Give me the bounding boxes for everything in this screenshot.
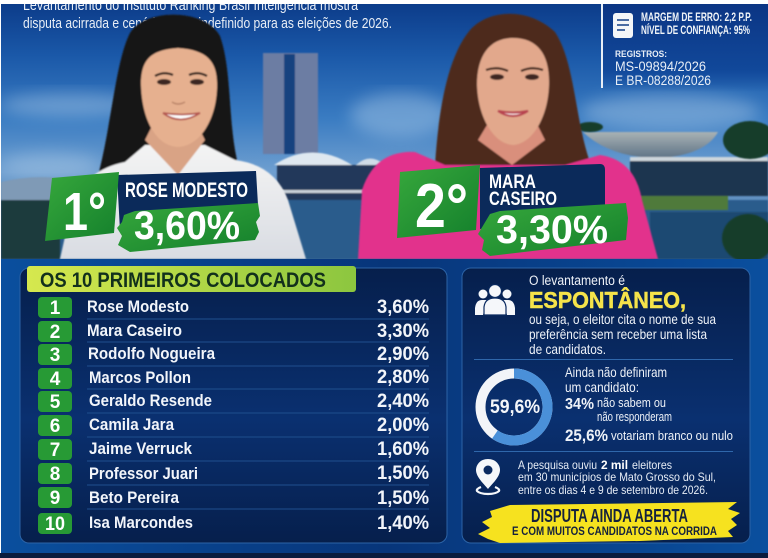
rank number: 2° xyxy=(415,172,468,241)
info box background xyxy=(603,8,768,88)
intro text: disputa acirrada e cenário ainda indefinido para as eleições de 2026. xyxy=(23,16,392,32)
row 1: Rose Modesto xyxy=(87,297,189,316)
row 9: Beto Pereira xyxy=(89,488,179,507)
candidate photo: Mara Caseiro xyxy=(358,14,658,259)
icon: people xyxy=(475,284,515,315)
spontaneous survey text: preferência sem receber uma lista xyxy=(529,326,707,342)
row 4: 4 xyxy=(50,369,61,390)
ranking panel background xyxy=(20,268,447,543)
spontaneous survey text: ou seja, o eleitor cita o nome de sua xyxy=(529,311,716,327)
rank number: 1° xyxy=(63,182,106,242)
undecided voters text xyxy=(565,364,733,445)
row 6: 6 xyxy=(50,416,60,437)
survey sample text xyxy=(518,458,716,497)
undecided voters text: não responderam xyxy=(597,409,672,424)
row 10 xyxy=(38,513,429,535)
row 8: 8 xyxy=(50,464,60,485)
row 7: Jaime Verruck xyxy=(89,439,192,458)
candidate name: ROSE MODESTO xyxy=(125,179,248,202)
details panel background xyxy=(462,268,750,543)
row 10: 1,40% xyxy=(377,513,429,534)
name plate xyxy=(480,164,605,229)
undecided voters text: votariam branco ou nulo xyxy=(611,428,733,443)
row 9: 9 xyxy=(50,488,60,509)
icon: document xyxy=(613,13,633,38)
row 2: 2 xyxy=(50,322,60,343)
intro text xyxy=(24,4,391,31)
row 3: 2,90% xyxy=(377,344,429,365)
left hills xyxy=(1,177,60,259)
row 8 xyxy=(38,463,429,485)
row 4: 2,80% xyxy=(377,367,429,388)
row 5: Geraldo Resende xyxy=(89,391,212,410)
candidate name: CASEIRO xyxy=(489,189,557,210)
row 10: Isa Marcondes xyxy=(89,513,193,532)
lower blue background xyxy=(1,259,768,553)
domes and congress building xyxy=(1,152,768,259)
row 4: Marcos Pollon xyxy=(89,368,191,387)
saucer building xyxy=(583,132,768,259)
row 7: 7 xyxy=(50,440,60,461)
row 3: Rodolfo Nogueira xyxy=(88,344,215,363)
callout: open race xyxy=(478,502,740,543)
registrations text: E BR-08288/2026 xyxy=(615,73,711,88)
row 3: 3 xyxy=(50,345,60,366)
row 8: Professor Juari xyxy=(89,464,198,483)
spontaneous survey text xyxy=(529,273,716,357)
donut chart: 59,6% xyxy=(480,373,548,440)
undecided voters text: um candidato: xyxy=(565,379,639,395)
row 5: 5 xyxy=(50,392,61,413)
row 6: Camila Jara xyxy=(89,415,174,434)
row 10: 10 xyxy=(45,514,65,535)
survey sample text: A pesquisa ouviu xyxy=(518,458,597,472)
row 8: 1,50% xyxy=(377,463,429,484)
palm trees xyxy=(577,121,768,262)
icon: location pin xyxy=(476,459,500,494)
row 2: Mara Caseiro xyxy=(87,321,182,340)
green brush xyxy=(478,203,628,256)
panel: survey details xyxy=(462,268,750,543)
candidate name: MARA xyxy=(489,172,536,193)
row 9 xyxy=(38,487,429,509)
callout: open race: E COM MUITOS CANDIDATOS NA CORRIDA xyxy=(512,524,717,538)
row 1: 1 xyxy=(50,298,61,319)
row 5 xyxy=(38,391,429,413)
undecided voters text: 34% xyxy=(565,396,594,413)
name plate xyxy=(118,171,258,225)
ranking heading: OS 10 PRIMEIROS COLOCADOS xyxy=(40,269,326,292)
undecided voters text: 25,6% xyxy=(565,426,608,445)
spontaneous survey text: de candidatos. xyxy=(529,341,606,357)
info box: margin and registrations xyxy=(601,4,768,92)
undecided voters text: não sabem ou xyxy=(597,395,666,410)
row 5: 2,40% xyxy=(377,391,429,412)
panel: top 10 ranking xyxy=(20,266,447,543)
undecided voters text: Ainda não definiram xyxy=(565,364,667,380)
row 1 xyxy=(38,297,429,319)
rank badge: second place xyxy=(397,164,628,256)
registrations text xyxy=(616,50,710,85)
registrations text: REGISTROS: xyxy=(615,49,667,59)
row 1: 3,60% xyxy=(377,297,429,318)
rank tile xyxy=(45,172,119,241)
row 4 xyxy=(38,367,429,390)
clouds xyxy=(0,93,760,177)
info box divider xyxy=(601,4,603,88)
row 7 xyxy=(38,439,429,461)
sky xyxy=(1,4,768,259)
rank badge: first place xyxy=(45,171,260,252)
congress towers xyxy=(263,53,318,154)
spontaneous survey text: O levantamento é xyxy=(529,273,625,288)
row 9: 1,50% xyxy=(377,488,429,509)
highlighted word: ESPONTÂNEO, xyxy=(529,286,686,313)
rank tile xyxy=(397,165,480,238)
hero: background scene and candidates xyxy=(0,0,768,262)
registrations text: MS-09894/2026 xyxy=(615,59,706,74)
row 7: 1,60% xyxy=(377,439,429,460)
row 2 xyxy=(38,321,429,343)
row 2: 3,30% xyxy=(377,321,429,342)
donut chart: 59,6%: 59,6% xyxy=(490,397,540,418)
row 3 xyxy=(38,344,429,366)
callout: open race: DISPUTA AINDA ABERTA xyxy=(531,506,688,526)
percentage: 3,60% xyxy=(134,204,240,248)
candidate name xyxy=(490,174,556,205)
survey sample text: 2 mil xyxy=(601,458,628,472)
margin of error text xyxy=(641,12,752,37)
row 6 xyxy=(38,415,429,437)
row 6: 2,00% xyxy=(377,415,429,436)
survey sample text: entre os dias 4 e 9 de setembro de 2026. xyxy=(518,483,708,497)
bottom dark strip xyxy=(0,553,768,558)
candidate photo: Rose Modesto xyxy=(60,15,306,259)
green brush xyxy=(117,203,260,252)
survey sample text: em 30 municípios de Mato Grosso do Sul, xyxy=(518,470,716,484)
percentage: 3,30% xyxy=(496,208,608,252)
survey sample text: eleitores xyxy=(632,458,672,472)
